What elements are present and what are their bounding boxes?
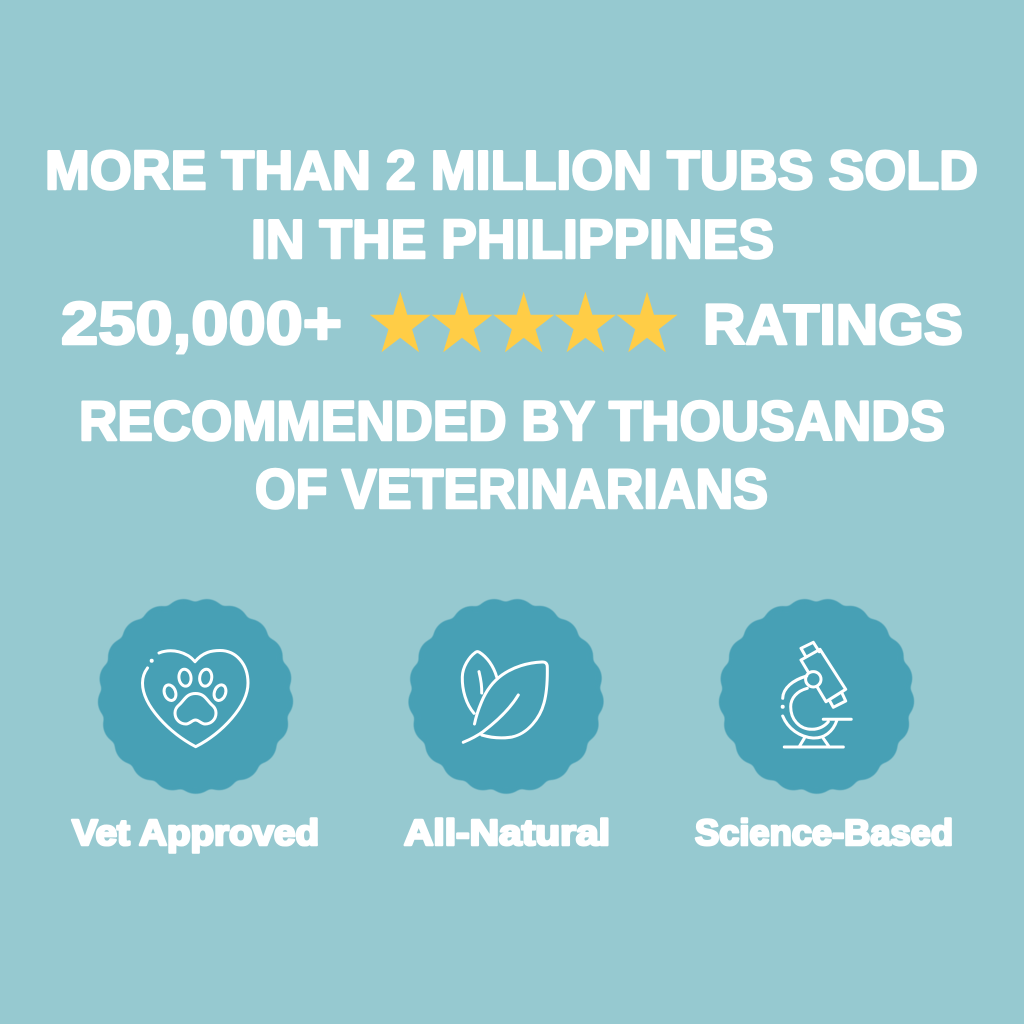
rating count: 250,000+	[61, 290, 342, 357]
heading: recommended line 2: OF VETERINARIANS	[255, 457, 768, 520]
icon: leaves	[462, 652, 547, 742]
icon: five gold stars	[370, 292, 678, 352]
panel: science-based	[695, 611, 953, 853]
heading: tubs sold line 1: MORE THAN 2 MILLION TUBS SOLD	[45, 139, 978, 201]
badge: all-natural	[421, 611, 591, 781]
heading: tubs sold line 2: IN THE PHILIPPINES	[251, 208, 774, 270]
label: all-natural: All-Natural	[404, 812, 610, 853]
label: vet approved: Vet Approved	[72, 812, 319, 853]
icon: paw in heart	[142, 650, 248, 747]
label: science-based: Science-Based	[695, 812, 953, 853]
panel: all-natural	[404, 611, 610, 853]
panel: vet approved	[72, 611, 319, 853]
icon: microscope	[781, 642, 851, 747]
ratings word: RATINGS	[703, 293, 963, 357]
heading: recommended line 1: RECOMMENDED BY THOUSANDS	[79, 389, 945, 452]
badge: science-based	[732, 611, 902, 781]
badge: vet approved	[110, 611, 280, 781]
